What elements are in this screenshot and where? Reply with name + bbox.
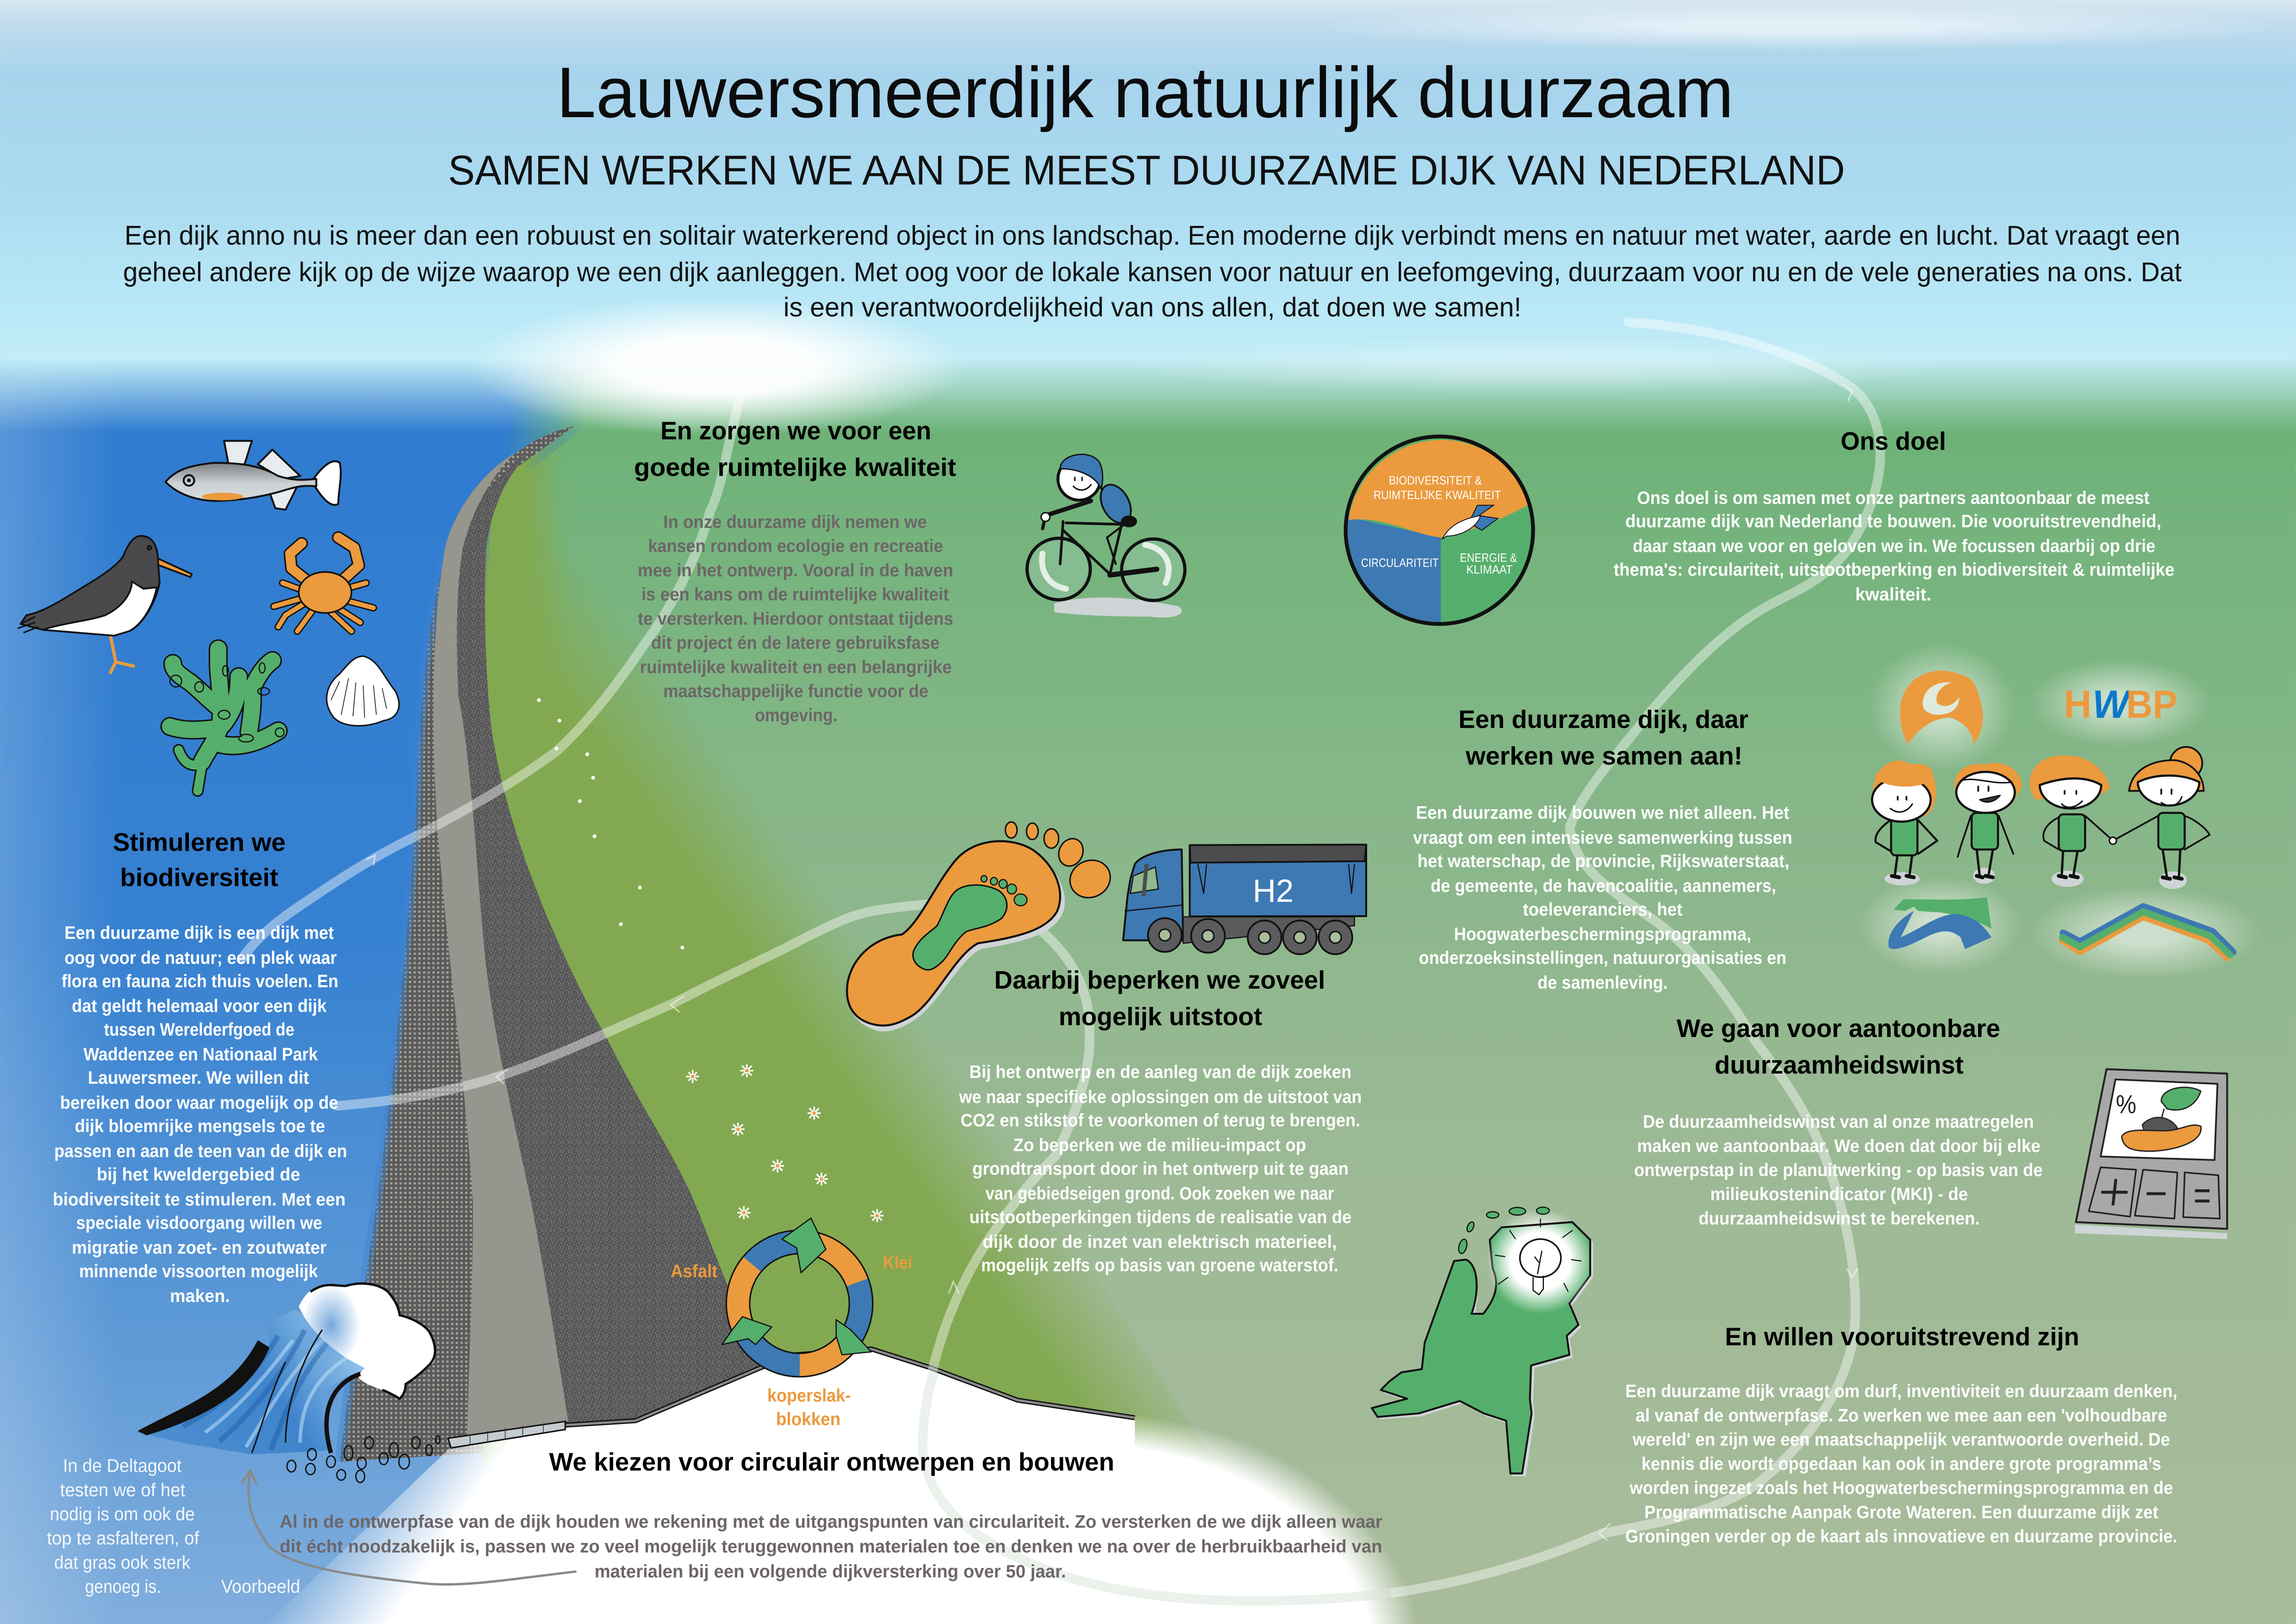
- body text: Zo beperken we de milieu-impact op: [1013, 1136, 1306, 1156]
- body text: Een duurzame dijk bouwen we niet alleen. Het: [1416, 803, 1789, 823]
- body text: het waterschap, de provincie, Rijkswaterstaat,: [1418, 851, 1789, 871]
- body text: daar staan we voor en geloven we in. We focussen daarbij op drie: [1633, 537, 2155, 556]
- heading: En willen vooruitstrevend zijn: [1725, 1322, 2079, 1351]
- icon: shell: [327, 656, 399, 726]
- dike: stone revetment with dots: [340, 426, 574, 1462]
- subtitle: SAMEN WERKEN WE AAN DE MEEST DUURZAME DIJK VAN NEDERLAND: [448, 147, 1845, 194]
- dike: light gravel band: [434, 453, 568, 1438]
- ring labels: Asfalt: [671, 1262, 717, 1281]
- chart: three themes circle: [1346, 437, 1533, 624]
- background: sky: [0, 0, 2296, 432]
- icon: circular ring: [722, 1218, 873, 1377]
- heading: En zorgen we voor een: [660, 416, 931, 445]
- body text: duurzame dijk van Nederland te bouwen. Die vooruitstrevendheid,: [1625, 512, 2161, 531]
- heading: [1458, 705, 1748, 770]
- body text: In onze duurzame dijk nemen we: [663, 512, 927, 532]
- logo: HWBP: W: [2092, 682, 2132, 726]
- person 2: [1954, 763, 2022, 884]
- body text: Een duurzame dijk is een dijk met: [64, 923, 334, 943]
- body text: bereiken door waar mogelijk op de: [60, 1093, 338, 1113]
- heading: We gaan voor aantoonbare: [1677, 1014, 2000, 1043]
- group of four people: [1872, 747, 2209, 889]
- dike: soft water edge: [340, 539, 451, 1462]
- panel: biodiversiteit: [53, 828, 347, 1306]
- callout: Deltagoot example: testen we of het: [60, 1480, 185, 1500]
- heading: [113, 828, 286, 892]
- body text: onderzoeksinstellingen, natuurorganisaties en: [1419, 948, 1786, 968]
- body text: Hoogwaterbeschermingsprogramma,: [1454, 924, 1751, 944]
- body text: wereld' en zijn we een maatschappelijk verantwoorde overheid. De: [1632, 1430, 2170, 1450]
- background: water: [0, 351, 586, 1624]
- body text: Groningen verder op de kaart als innovatieve en duurzame provincie.: [1625, 1526, 2178, 1546]
- heading: [1677, 1014, 2000, 1079]
- panel: circulair: [280, 1447, 1382, 1581]
- body text: toeleveranciers, het: [1523, 899, 1682, 919]
- callout: Deltagoot example: genoeg is.: [85, 1577, 161, 1597]
- body text: grondtransport door in het ontwerp uit te gaan: [972, 1159, 1349, 1179]
- body text: de samenleving.: [1537, 973, 1668, 993]
- dike: white cross-section: [267, 1349, 1418, 1624]
- title: Lauwersmeerdijk natuurlijk duurzaam: [556, 52, 1734, 132]
- logo: HWBP: [2064, 682, 2178, 726]
- body text: al vanaf de ontwerpfase. Zo werken we mee aan een 'volhoudbare: [1636, 1405, 2167, 1425]
- heading: Een duurzame dijk, daar: [1458, 705, 1748, 733]
- intro text: Een dijk anno nu is meer dan een robuust en solitair waterkerend object in ons landschap. Een moderne dijk verbindt mens en natuur met water, aarde en lucht. Dat vraagt een: [124, 220, 2180, 250]
- body text: Waddenzee en Nationaal Park: [83, 1045, 318, 1065]
- body text: speciale visdoorgang willen we: [76, 1213, 322, 1233]
- chart labels: KLIMAAT: [1466, 563, 1512, 576]
- callout: Deltagoot example: [47, 1456, 300, 1597]
- body text: de gemeente, de havencoalitie, aannemers,: [1431, 876, 1776, 896]
- callout: Deltagoot example: nodig is om ook de: [50, 1504, 195, 1524]
- chart labels: RUIMTELIJKE KWALITEIT: [1374, 489, 1501, 502]
- body text: milieukostenindicator (MKI) - de: [1710, 1185, 1968, 1205]
- body text: mee in het ontwerp. Vooral in de haven: [638, 561, 953, 581]
- dike: cross-section outline: [448, 1349, 1135, 1448]
- body text: duurzaamheidswinst te berekenen.: [1699, 1209, 1980, 1229]
- panel: ruimtelijke kwaliteit: [634, 416, 956, 725]
- body text: dijk bloemrijke mengsels toe te: [75, 1117, 325, 1137]
- body text: vraagt om een intensieve samenwerking tussen: [1413, 828, 1792, 848]
- body text: Ons doel is om samen met onze partners aantoonbaar de meest: [1637, 488, 2150, 508]
- logo: HWBP: H: [2064, 682, 2091, 726]
- icon: calculator: [2075, 1069, 2227, 1239]
- body text: [1625, 1381, 2178, 1546]
- panel: samen: [1413, 705, 1792, 993]
- icon: oystercatcher bird: [18, 536, 192, 674]
- logo glows: [1858, 643, 2262, 980]
- body text: thema's: circulariteit, uitstootbeperking en biodiversiteit & ruimtelijke: [1614, 560, 2174, 580]
- body text: maatschappelijke functie voor de: [663, 681, 928, 701]
- callout: Deltagoot example: Voorbeeld: [221, 1577, 300, 1597]
- heading: Stimuleren we: [113, 828, 286, 856]
- body text: kennis die wordt opgedaan kan ook in andere grote programma’s: [1642, 1454, 2161, 1474]
- panel: ons doel: [1614, 426, 2174, 605]
- ring labels: blokken: [776, 1409, 840, 1429]
- body text: CO2 en stikstof te voorkomen of terug te brengen.: [961, 1111, 1360, 1131]
- body text: [958, 1062, 1362, 1275]
- icon: fish: [166, 441, 341, 510]
- arrow: example to wave: [242, 1470, 575, 1585]
- body text: omgeving.: [755, 706, 838, 725]
- intro text: is een verantwoordelijkheid van ons allen, dat doen we samen!: [784, 292, 1521, 322]
- flow line through the story: [242, 322, 1880, 1601]
- body text: oog voor de natuur; een plek waar: [64, 948, 337, 968]
- callout: Deltagoot example: dat gras ook sterk: [54, 1552, 190, 1573]
- heading: We kiezen voor circulair ontwerpen en bouwen: [549, 1447, 1114, 1476]
- flow line on white mound: [922, 1362, 1391, 1601]
- body text: we naar specifieke oplossingen om de uitstoot van: [958, 1087, 1362, 1107]
- heading: Daarbij beperken we zoveel: [994, 966, 1325, 994]
- body text: biodiversiteit te stimuleren. Met een: [53, 1190, 346, 1210]
- body text: dijk door de inzet van elektrisch materieel,: [983, 1232, 1337, 1252]
- body text: dit project én de latere gebruiksfase: [651, 633, 940, 653]
- panel: vooruitstrevend: [1625, 1322, 2178, 1546]
- body text: [638, 512, 953, 725]
- icon: crab: [274, 537, 373, 631]
- heading: Ons doel: [1841, 426, 1946, 455]
- dike: asphalt: [447, 426, 765, 1424]
- heading: biodiversiteit: [120, 863, 278, 892]
- body text: maken we aantoonbaar. We doen dat door bij elke: [1637, 1136, 2041, 1156]
- panel: uitstoot: [958, 966, 1362, 1275]
- body text: ruimtelijke kwaliteit en een belangrijke: [640, 657, 952, 677]
- dike: grass slope: [483, 428, 1215, 1465]
- chart labels: ENERGIE &: [1460, 551, 1517, 564]
- body text: Al in de ontwerpfase van de dijk houden we rekening met de uitgangspunten van circulariteit. Zo versterken de we dijk alleen waar: [280, 1512, 1382, 1532]
- icon: cyclist: [1027, 454, 1185, 618]
- body text: Bij het ontwerp en de aanleg van de dijk zoeken: [970, 1062, 1351, 1082]
- icon: breaking wave: [136, 1284, 436, 1455]
- body text: tussen Werelderfgoed de: [104, 1020, 294, 1040]
- body text: [53, 923, 347, 1306]
- body text: Lauwersmeer. We willen dit: [88, 1068, 309, 1088]
- body text: te versterken. Hierdoor ontstaat tijdens: [638, 609, 953, 629]
- ring labels: koperslak-: [767, 1386, 851, 1406]
- icon: seaweed: [170, 649, 284, 791]
- background: clouds: [469, 3, 2284, 437]
- person 3: [2030, 756, 2111, 887]
- body text: migratie van zoet- en zoutwater: [72, 1238, 327, 1258]
- body text: Programmatische Aanpak Grote Wateren. Een duurzame dijk zet: [1644, 1502, 2159, 1522]
- body text: [1614, 488, 2174, 605]
- panel: duurzaamheidswinst: [1634, 1014, 2043, 1229]
- logo: waterschap: [1888, 897, 1991, 949]
- icon: Netherlands with light bulb: [1372, 1207, 1594, 1476]
- flowers and dots on the slope: [537, 698, 883, 1222]
- chart labels: BIODIVERSITEIT &: [1389, 474, 1482, 487]
- body text: dit écht noodzakelijk is, passen we zo veel mogelijk teruggewonnen materialen toe en denken we na over de herbruikbaarheid van: [280, 1537, 1382, 1557]
- body text: van gebiedseigen grond. Ook zoeken we naar: [985, 1184, 1334, 1204]
- heading: mogelijk uitstoot: [1059, 1002, 1262, 1031]
- body text: uitstootbeperkingen tijdens de realisatie van de: [970, 1207, 1351, 1227]
- flow line arrowheads: [366, 384, 1858, 1541]
- calculator percent sign: %: [2116, 1089, 2136, 1119]
- body text: [280, 1512, 1382, 1581]
- body text: ontwerpstap in de planuitwerking - op basis van de: [1634, 1161, 2043, 1181]
- body text: is een kans om de ruimtelijke kwaliteit: [641, 585, 949, 605]
- logo: province/waterboard: [1900, 671, 1983, 744]
- callout: Deltagoot example: In de Deltagoot: [63, 1456, 181, 1476]
- icon: footprint: [847, 822, 1116, 1031]
- intro text: [123, 220, 2182, 322]
- body text: [1413, 803, 1792, 993]
- heading: duurzaamheidswinst: [1715, 1050, 1964, 1079]
- person 1: [1872, 761, 1937, 886]
- icon: feather: [1442, 506, 1498, 539]
- ring labels: [671, 1253, 912, 1429]
- heading: [994, 966, 1325, 1031]
- body text: kansen rondom ecologie en recreatie: [648, 537, 943, 556]
- person 4: [2109, 747, 2209, 889]
- background: green land: [0, 351, 2296, 1624]
- body text: worden ingezet zoals het Hoogwaterbeschermingsprogramma en de: [1629, 1478, 2173, 1498]
- body text: maken.: [170, 1287, 230, 1306]
- body text: materialen bij een volgende dijkversterking over 50 jaar.: [595, 1562, 1066, 1581]
- icon: hydrogen truck: [1123, 845, 1366, 954]
- body text: bij het kweldergebied de: [97, 1165, 300, 1185]
- logo: dike line: [2062, 906, 2233, 958]
- body text: Een duurzame dijk vraagt om durf, inventiviteit en duurzaam denken,: [1625, 1381, 2178, 1401]
- heading: [634, 416, 956, 481]
- ring labels: Klei: [883, 1253, 912, 1273]
- intro text: geheel andere kijk op de wijze waarop we een dijk aanleggen. Met oog voor de lokale kansen voor natuur en leefomgeving, duurzaam voor nu en de vele generaties na ons. Dat: [123, 257, 2182, 287]
- chart labels: CIRCULARITEIT: [1361, 556, 1439, 569]
- icon: revetment stones: [287, 1436, 440, 1482]
- heading: werken we samen aan!: [1465, 741, 1742, 770]
- callout: Deltagoot example: top te asfalteren, of: [47, 1528, 199, 1549]
- body text: dat geldt helemaal voor een dijk: [72, 996, 327, 1016]
- heading: goede ruimtelijke kwaliteit: [634, 453, 956, 481]
- body text: flora en fauna zich thuis voelen. En: [62, 971, 338, 991]
- truck label: H2: [1253, 873, 1294, 909]
- chart labels: [1361, 474, 1517, 576]
- body text: De duurzaamheidswinst van al onze maatregelen: [1643, 1112, 2034, 1132]
- body text: mogelijk zelfs op basis van groene waterstof.: [981, 1255, 1338, 1275]
- body text: kwaliteit.: [1855, 585, 1931, 605]
- body text: passen en aan de teen van de dijk en: [54, 1141, 347, 1161]
- body text: [1634, 1112, 2043, 1229]
- logo: HWBP: BP: [2126, 682, 2178, 726]
- body text: minnende vissoorten mogelijk: [79, 1262, 318, 1281]
